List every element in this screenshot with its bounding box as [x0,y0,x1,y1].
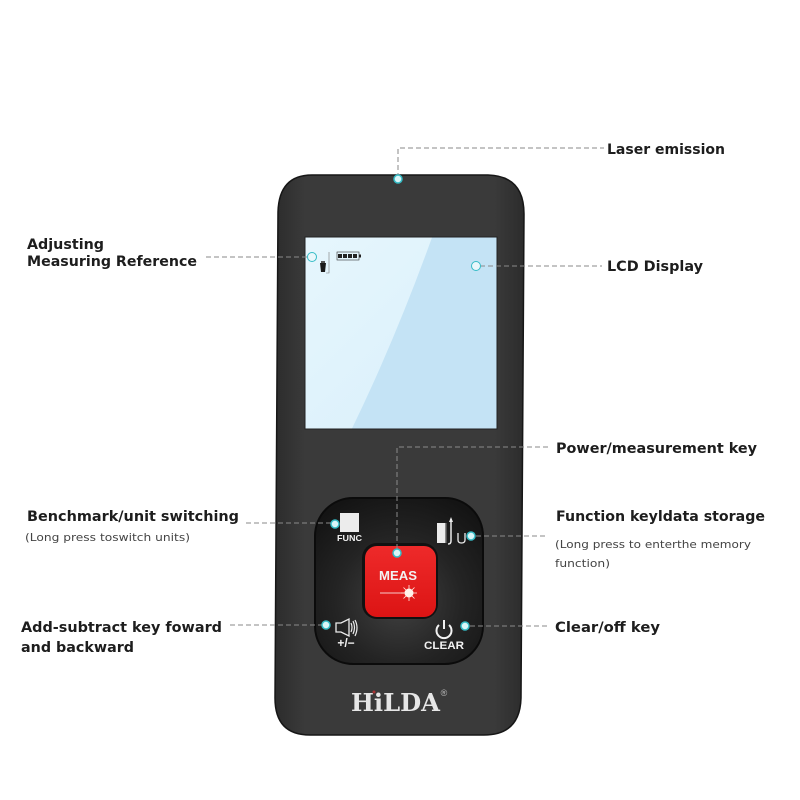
callout: function key data storage: (Long press to enterthe memory [555,538,752,551]
callout: clear/off key [461,620,660,636]
callout: adjusting measuring reference [27,237,316,270]
FUNC key: FUNC [337,533,362,543]
callout: clear/off key: Clear/off key [555,620,660,636]
HILDA logo: HiLDA [351,688,440,717]
clear key: CLEAR [424,640,464,652]
callout: add-subtract key: and backward [21,640,134,656]
add-subtract key: +/− [337,636,355,650]
callout: adjusting measuring reference: Measuring Reference [27,254,197,270]
LCD screen [305,237,497,429]
add-subtract key [336,619,357,650]
callout: power/measurement key [393,441,757,557]
callout: function key data storage: Function keyldata storage [556,509,765,525]
clear key [424,620,464,652]
callout: LCD display [472,259,703,275]
callout: laser emission: Laser emission [607,142,725,158]
MEAS key: MEAS [379,569,417,583]
callout: benchmark/unit switching: (Long press toswitch units) [25,531,190,544]
callout: add-subtract key: Add-subtract key foward [21,620,222,636]
icon: battery indicator [337,252,361,260]
callout: function key data storage: function) [555,557,610,570]
device body [275,175,524,735]
callout: benchmark/unit switching: Benchmark/unit switching [27,509,239,525]
callout: benchmark/unit switching [25,509,339,544]
callout: function key data storage [467,509,765,570]
FUNC key [337,513,362,543]
callout: adjusting measuring reference: Adjusting [27,237,104,253]
callout: laser emission [394,142,725,183]
MEAS key [362,543,438,619]
callout: power/measurement key: Power/measurement key [556,441,757,457]
icon: measuring reference [320,252,329,273]
keypad [315,498,483,664]
callout: add-subtract key [21,620,330,656]
data storage key icon [437,517,465,544]
callout: LCD display: LCD Display [607,259,703,275]
HILDA logo: ® [441,688,448,698]
